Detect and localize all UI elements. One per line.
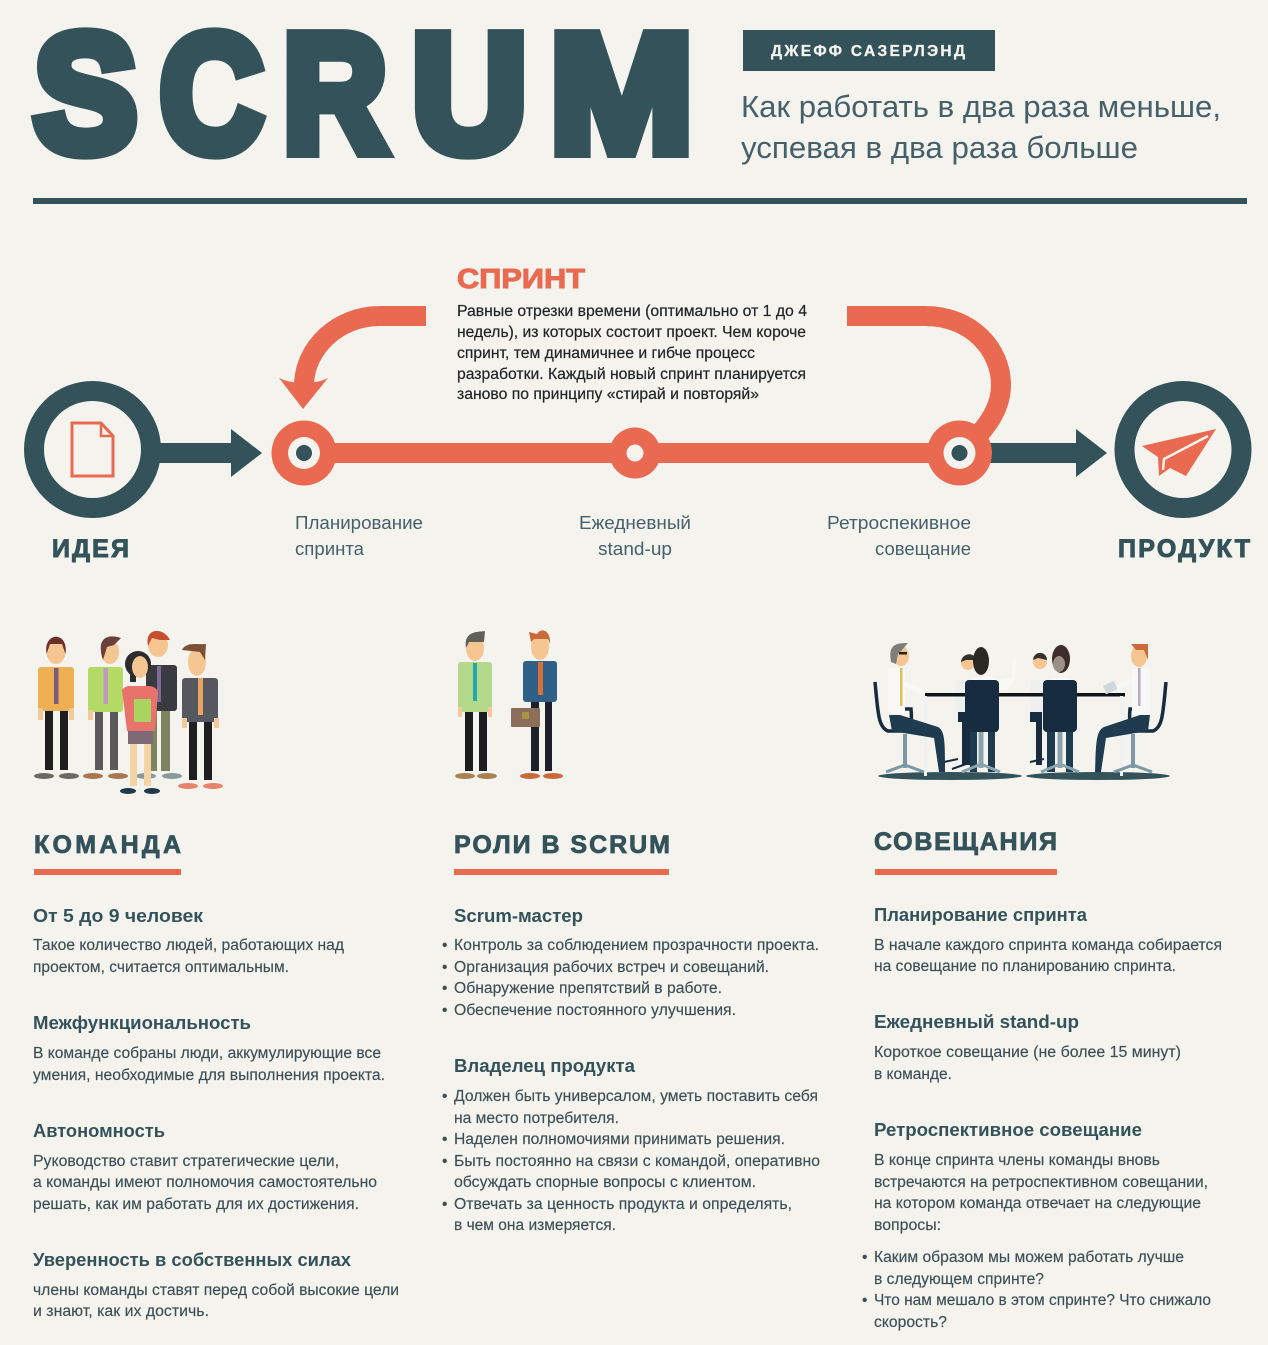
label: sprint planning: спринта xyxy=(295,539,365,559)
icon: product circle with paper plane xyxy=(1124,391,1242,508)
block: sprint planning: Планирование спринта xyxy=(874,905,1088,925)
block: daily stand-up: Ежедневный stand-up xyxy=(874,1012,1079,1032)
subtitle: Как работать в два раза меньше, xyxy=(741,89,1221,124)
block: daily stand-up xyxy=(874,1012,1181,1083)
illustration: team xyxy=(34,631,223,794)
block: product owner: • xyxy=(442,1088,447,1105)
seated back view right xyxy=(1041,645,1079,772)
illustration: meeting xyxy=(875,643,1170,780)
block: scrum master: Scrum-мастер xyxy=(454,906,583,926)
person: woman with green folder xyxy=(120,651,160,794)
arrow: idea to sprint xyxy=(155,429,262,477)
sprint description: разработки. Каждый новый спринт планируется xyxy=(457,366,806,383)
subtitle xyxy=(741,89,1221,165)
block: scrum master: • xyxy=(442,1002,447,1019)
block: sprint planning xyxy=(874,905,1222,975)
label: sprint planning: Планирование xyxy=(295,513,423,533)
seated back view left xyxy=(962,647,1016,772)
sprint description xyxy=(457,303,807,403)
block: autonomy: решать, как им работать для их достижения. xyxy=(33,1196,359,1213)
block: product owner: обсуждать спорные вопросы с клиентом. xyxy=(454,1174,756,1191)
label: sprint planning xyxy=(295,513,423,559)
block: cross-functionality xyxy=(33,1013,385,1084)
floor shadows xyxy=(878,772,1170,780)
panel: roles xyxy=(442,831,820,1234)
right man on chair xyxy=(1095,644,1166,772)
block: sprint planning: на совещание по планированию спринта. xyxy=(874,958,1176,975)
block: cross-functionality: умения, необходимые для выполнения проекта. xyxy=(33,1067,385,1084)
arrow: sprint to product xyxy=(985,429,1107,477)
label: daily stand-up: Ежедневный xyxy=(579,513,691,533)
arrow: sprint loop right xyxy=(847,316,1001,443)
sprint heading: СПРИНТ xyxy=(457,263,585,294)
heading: meetings xyxy=(874,828,1057,875)
block: product owner: на место потребителя. xyxy=(454,1110,619,1127)
title: SCRUM xyxy=(34,1,693,187)
sprint description: заново по принципу «стирай и повторяй» xyxy=(457,386,759,403)
block: retrospective: • xyxy=(862,1292,867,1309)
block: confidence xyxy=(33,1250,399,1320)
label: idea: ИДЕЯ xyxy=(52,535,129,563)
block: scrum master: • xyxy=(442,980,447,997)
label: retrospective xyxy=(827,513,971,559)
block: team size: Такое количество людей, работающих над xyxy=(33,937,344,954)
person: back man in dark jacket xyxy=(136,631,182,779)
block: confidence: члены команды ставят перед собой высокие цели xyxy=(33,1282,399,1299)
block: product owner: • xyxy=(442,1196,447,1213)
block: sprint planning: В начале каждого спринта команда собирается xyxy=(874,937,1222,954)
arrow: sprint return left xyxy=(279,316,426,409)
icon: idea circle with document xyxy=(34,391,151,508)
block: retrospective: Что нам мешало в этом спринте? Что снижало xyxy=(874,1292,1211,1309)
left man on chair xyxy=(875,643,945,772)
block: product owner: Должен быть универсалом, уметь поставить себя xyxy=(454,1088,818,1105)
title: SCRUM: M xyxy=(550,1,693,187)
panel: team xyxy=(33,831,399,1320)
block: autonomy xyxy=(33,1121,377,1213)
title: SCRUM: R xyxy=(283,1,387,187)
title: SCRUM: S xyxy=(34,1,137,187)
block: product owner: Наделен полномочиями принимать решения. xyxy=(454,1131,785,1148)
label: retrospective: совещание xyxy=(875,539,971,559)
author badge xyxy=(743,30,995,71)
sprint timeline bar xyxy=(304,443,960,463)
label: retrospective: Ретроспекивное xyxy=(827,513,971,533)
heading: team: КОМАНДА xyxy=(34,831,181,859)
block: retrospective: встречаются на ретроспективном совещании, xyxy=(874,1174,1208,1191)
block: retrospective xyxy=(862,1120,1211,1331)
person: green jacket xyxy=(83,636,128,779)
person: product owner with briefcase xyxy=(511,630,563,779)
block: product owner: Отвечать за ценность продукта и определять, xyxy=(454,1196,792,1213)
author badge: ДЖЕФФ САЗЕРЛЭНД xyxy=(771,43,965,60)
node: retrospective xyxy=(927,420,992,486)
person: scrum master xyxy=(455,631,497,779)
block: scrum master: Обеспечение постоянного улучшения. xyxy=(454,1002,736,1019)
block: retrospective: • xyxy=(862,1249,867,1266)
block: product owner: в чем она измеряется. xyxy=(454,1217,616,1234)
label: product: ПРОДУКТ xyxy=(1118,535,1250,563)
block: retrospective: Ретроспективное совещание xyxy=(874,1120,1142,1140)
node: daily stand-up xyxy=(610,428,660,478)
block: scrum master: Организация рабочих встреч и совещаний. xyxy=(454,959,769,976)
label: daily stand-up: stand-up xyxy=(598,539,672,559)
block: product owner xyxy=(442,1056,820,1234)
person: yellow jacket xyxy=(34,637,79,779)
block: autonomy: Руководство ставит стратегические цели, xyxy=(33,1153,339,1170)
block: confidence: и знают, как их достичь. xyxy=(33,1303,209,1320)
block: retrospective: вопросы: xyxy=(874,1217,941,1234)
block: daily stand-up: в команде. xyxy=(874,1066,952,1083)
heading: team xyxy=(34,831,181,875)
block: product owner: • xyxy=(442,1153,447,1170)
block: product owner: • xyxy=(442,1131,447,1148)
block: team size xyxy=(33,906,344,976)
block: team size: проектом, считается оптимальным. xyxy=(33,959,289,976)
panel: meetings xyxy=(862,828,1222,1331)
block: product owner: Быть постоянно на связи с командой, оперативно xyxy=(454,1153,820,1170)
block: scrum master: • xyxy=(442,937,447,954)
block: team size: От 5 до 9 человек xyxy=(33,906,204,926)
block: retrospective: Каким образом мы можем работать лучше xyxy=(874,1249,1184,1266)
person: grey jacket xyxy=(178,644,223,789)
subtitle: успевая в два раза больше xyxy=(741,130,1138,165)
heading: meetings: СОВЕЩАНИЯ xyxy=(874,828,1057,856)
block: scrum master: Контроль за соблюдением прозрачности проекта. xyxy=(454,937,819,954)
block: product owner: Владелец продукта xyxy=(454,1056,636,1076)
label: daily stand-up xyxy=(579,513,691,559)
block: autonomy: Автономность xyxy=(33,1121,165,1141)
block: cross-functionality: Межфункциональность xyxy=(33,1013,251,1033)
block: retrospective: в следующем спринте? xyxy=(874,1271,1044,1288)
illustration: roles xyxy=(455,630,563,779)
block: cross-functionality: В команде собраны люди, аккумулирующие все xyxy=(33,1045,381,1062)
far participants xyxy=(944,653,1047,769)
block: scrum master: • xyxy=(442,959,447,976)
title: SCRUM: C xyxy=(160,1,263,187)
block: autonomy: а команды имеют полномочия самостоятельно xyxy=(33,1174,377,1191)
node: sprint planning xyxy=(272,420,336,486)
sprint description: Равные отрезки времени (оптимально от 1 до 4 xyxy=(457,303,807,320)
block: scrum master xyxy=(442,906,819,1019)
heading: roles xyxy=(454,831,670,875)
sprint description: недель), из которых состоит проект. Чем короче xyxy=(457,324,806,341)
block: retrospective: В конце спринта члены команды вновь xyxy=(874,1152,1160,1169)
meeting table xyxy=(925,693,1125,696)
block: retrospective: на котором команда отвечает на следующие xyxy=(874,1195,1201,1212)
title: SCRUM: U xyxy=(412,1,527,187)
block: retrospective: скорость? xyxy=(874,1314,947,1331)
sprint description: спринт, тем динамичнее и гибче процесс xyxy=(457,345,755,362)
block: daily stand-up: Короткое совещание (не более 15 минут) xyxy=(874,1044,1181,1061)
block: confidence: Уверенность в собственных силах xyxy=(33,1250,351,1270)
heading: roles: РОЛИ В SCRUM xyxy=(454,831,670,859)
block: scrum master: Обнаружение препятствий в работе. xyxy=(454,980,722,997)
